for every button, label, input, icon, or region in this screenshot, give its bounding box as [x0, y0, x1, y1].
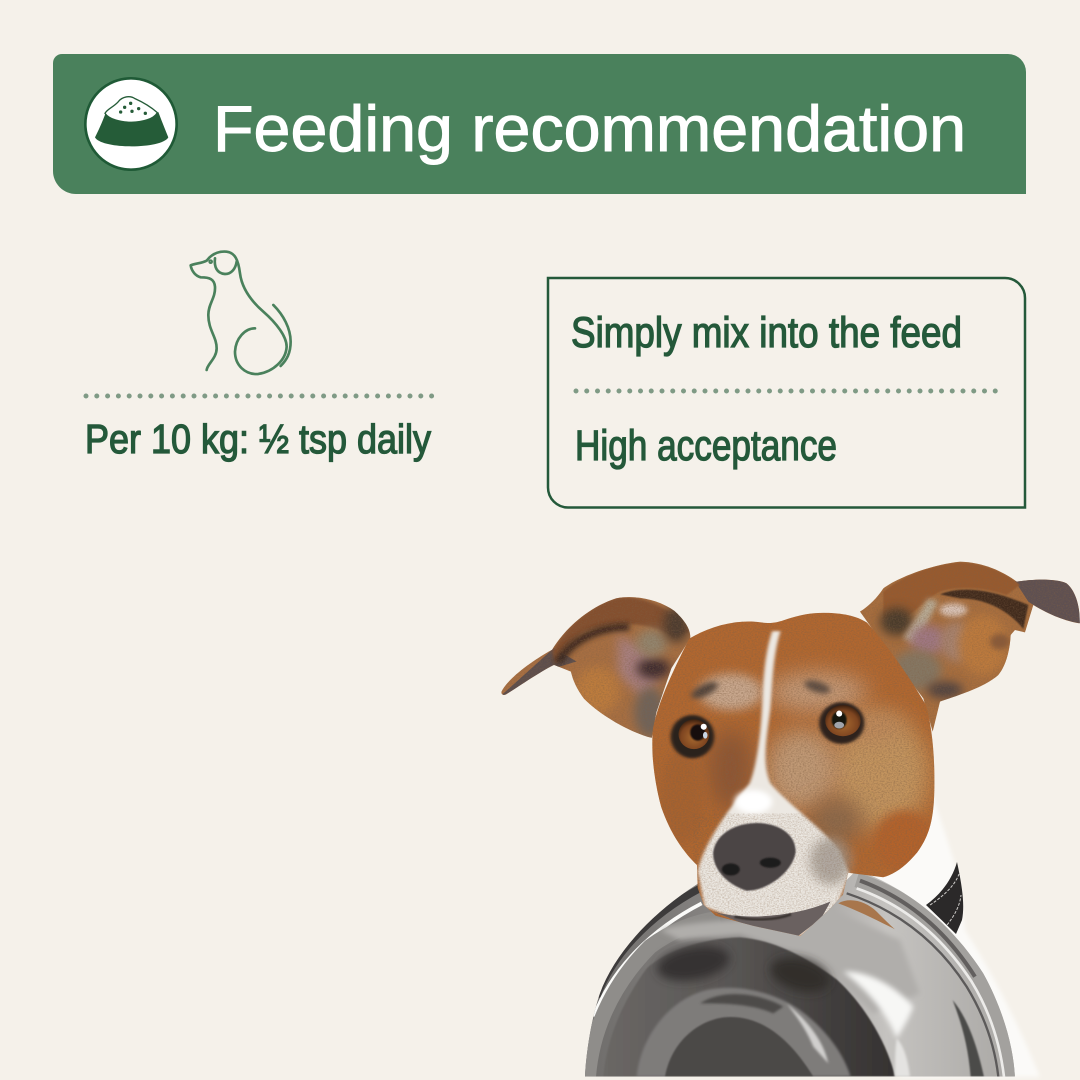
- bowl: [583, 868, 1017, 1077]
- basin: [603, 937, 895, 1077]
- dotted divider: [86, 394, 434, 398]
- header banner: [53, 54, 1026, 194]
- left ear: [498, 594, 697, 743]
- white chest: [850, 790, 1040, 1077]
- white blaze and muzzle: [698, 631, 849, 936]
- bowl rim right: [857, 880, 1010, 1077]
- eyes and nose: [671, 702, 864, 891]
- panel: usage notes: [548, 278, 1025, 508]
- collar: [926, 862, 963, 934]
- right ear: [860, 560, 1080, 733]
- icon: food bowl: [85, 78, 177, 170]
- copper reflection: [838, 900, 895, 929]
- left eye: [671, 715, 714, 758]
- light zone under muzzle: [660, 910, 920, 1013]
- dosage text: Per 10 kg: ½ tsp daily: [85, 416, 431, 462]
- right eye: [819, 702, 864, 744]
- panel: dosage: [85, 252, 434, 462]
- bright highlight: [843, 972, 913, 1038]
- bowl rim left: [597, 888, 700, 997]
- head: [648, 609, 940, 940]
- nose: [713, 823, 796, 891]
- title: Feeding recommendation: [213, 92, 966, 165]
- ring and bowl centre: [637, 988, 851, 1077]
- text: high acceptance: High acceptance: [575, 422, 837, 470]
- text: simply mix: Simply mix into the feed: [571, 309, 962, 357]
- dark strip right: [953, 1000, 984, 1077]
- dotted divider: [576, 388, 997, 394]
- icon: sitting dog outline: [191, 252, 291, 374]
- photo: dog holding steel bowl: [498, 560, 1080, 1077]
